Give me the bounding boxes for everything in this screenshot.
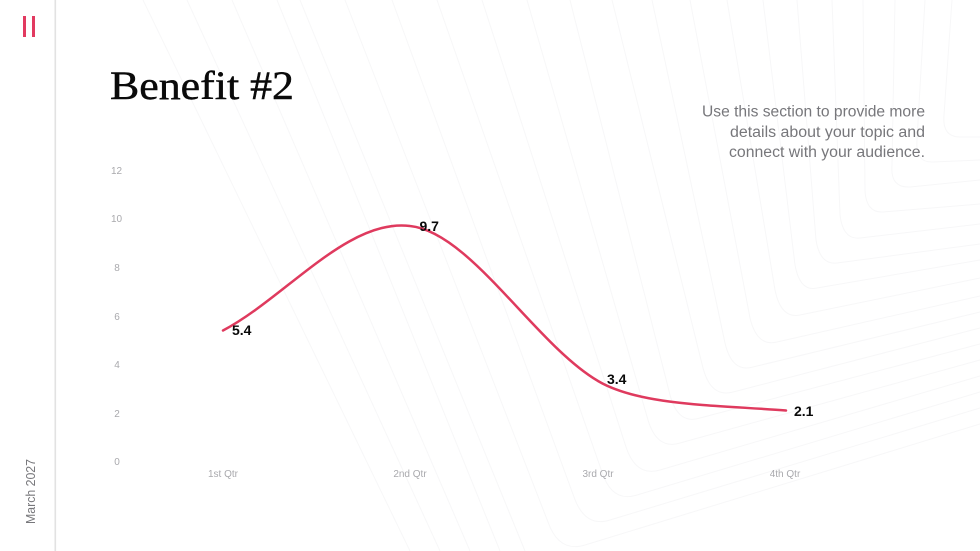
data labels: [232, 218, 814, 419]
description text: details about your topic and: [730, 124, 925, 141]
description text: Use this section to provide more: [702, 104, 925, 120]
x-axis labels: 2nd Qtr: [393, 469, 427, 480]
y-axis labels: 12: [111, 166, 122, 177]
description text: [702, 104, 925, 161]
x-axis labels: 3rd Qtr: [582, 469, 614, 480]
data line: [223, 225, 786, 410]
y-axis labels: 10: [111, 214, 122, 225]
y-axis labels: 6: [114, 312, 120, 323]
icon: pause-style section marker: [23, 16, 35, 37]
sidebar divider: [54, 0, 56, 551]
y-axis labels: 0: [114, 457, 120, 468]
x-axis labels: 1st Qtr: [208, 469, 239, 480]
x-axis labels: [208, 469, 801, 480]
date label: March 2027: [24, 459, 38, 524]
data labels: 9.7: [420, 218, 439, 234]
title: Benefit #2: [110, 63, 294, 108]
data labels: 3.4: [607, 371, 627, 387]
description text: connect with your audience.: [729, 144, 925, 161]
y-axis labels: 8: [114, 263, 120, 274]
x-axis labels: 4th Qtr: [770, 469, 801, 480]
y-axis labels: 4: [114, 360, 120, 371]
y-axis labels: 2: [114, 409, 120, 420]
line chart: [111, 166, 814, 480]
y-axis labels: [111, 166, 122, 468]
data labels: 5.4: [232, 322, 252, 338]
data labels: 2.1: [794, 403, 814, 419]
